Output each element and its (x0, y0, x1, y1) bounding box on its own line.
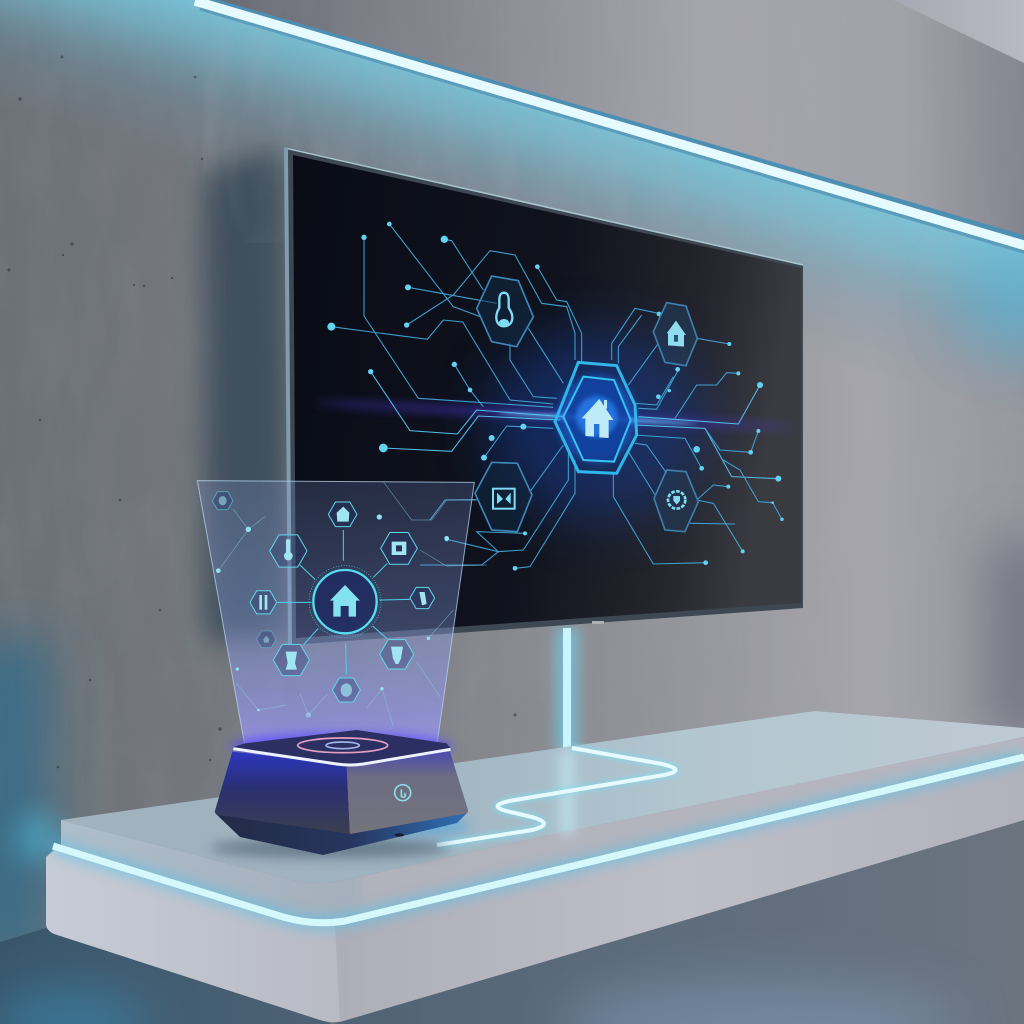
top LED light strip (188, 0, 1024, 253)
television (285, 147, 803, 645)
hologram icon glyph shapes (219, 496, 427, 697)
conduit reflection on shelf (559, 750, 575, 835)
top plate rings (298, 738, 388, 753)
shelf top surface (61, 711, 1024, 883)
device left face (215, 752, 350, 834)
hologram hexagon icons (212, 492, 435, 702)
smart hub device (215, 730, 468, 855)
device top plate (232, 730, 452, 765)
shelf edge light strip (53, 757, 1024, 923)
device violet glow (230, 733, 453, 761)
device glowing rim (233, 749, 451, 765)
hologram background network (218, 482, 487, 727)
upper wall section above light strip (203, 0, 1024, 243)
vertical light conduit (555, 628, 579, 750)
USB port (395, 833, 404, 837)
horizontal light flare (313, 398, 793, 432)
home hexagon icon (653, 303, 697, 366)
screen: smart home network diagram (313, 222, 793, 571)
device right face (347, 752, 468, 834)
wall specks (7, 56, 517, 768)
circuit lines (331, 224, 782, 568)
media hexagon icon (475, 462, 532, 532)
hologram nodes (216, 514, 449, 718)
thermometer hexagon icon (477, 276, 533, 347)
logo mark (592, 621, 604, 624)
power button (395, 785, 411, 801)
gear hexagon icon (654, 470, 698, 532)
light cable on shelf (437, 748, 676, 845)
hologram panel (197, 481, 487, 747)
shelf lower box left face (46, 850, 346, 1022)
hologram central house hub (309, 566, 381, 638)
hub device shadow and glow on shelf (210, 818, 470, 858)
shelf lower box right face (335, 755, 1024, 1022)
floor (0, 820, 1024, 1024)
circuit nodes (327, 222, 784, 571)
hologram connector lines (277, 530, 410, 675)
shelf (46, 711, 1024, 1022)
central hexagon house icon (555, 362, 637, 473)
ceiling corner (893, 0, 1024, 63)
shelf upper lip face (61, 737, 1024, 923)
device base (215, 812, 468, 855)
